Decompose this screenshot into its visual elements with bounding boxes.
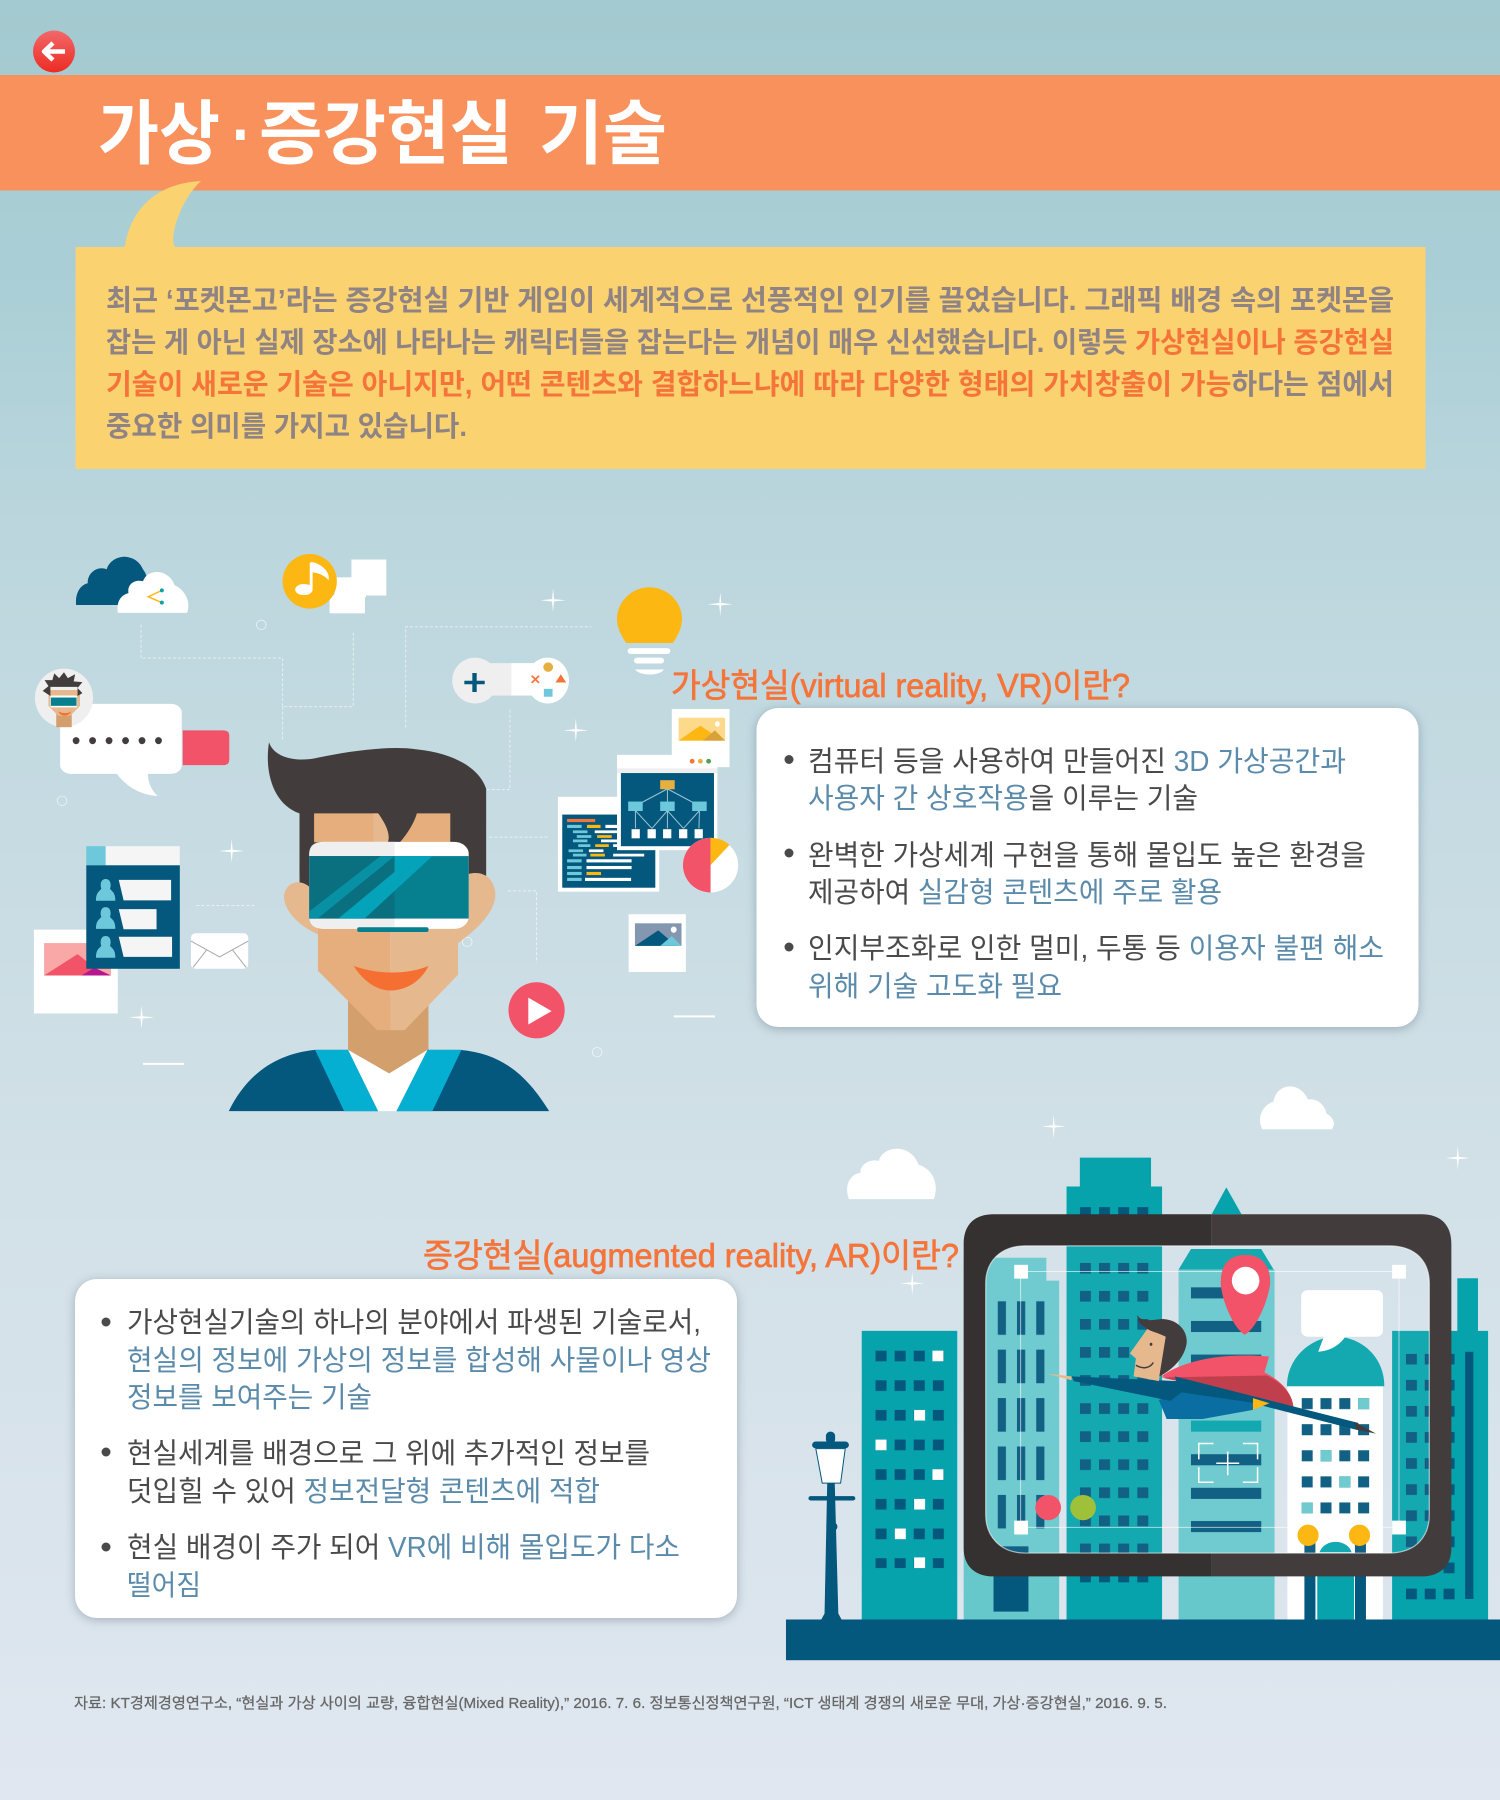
panel: intro speech box xyxy=(76,181,1426,469)
icon: image window xyxy=(672,709,729,767)
icon: hierarchy window xyxy=(617,755,717,850)
building F xyxy=(1392,1278,1488,1619)
AR bullet list: 현실의 정보에 가상의 정보를 합성해 사물이나 영상 xyxy=(127,1345,711,1377)
VR bullet list: 완벽한 가상세계 구현을 통해 몰입도 높은 환경을 xyxy=(808,840,1366,872)
icon: pie chart xyxy=(683,838,738,892)
AR overlay: coloured dots xyxy=(1035,1495,1370,1546)
tablet frame xyxy=(964,1214,1451,1576)
VR bullet list: 위해 기술 고도화 필요 xyxy=(808,971,1062,1003)
icon: speech bubble with avatar xyxy=(35,669,229,796)
VR bullet list: 컴퓨터 등을 사용하여 만들어진 3D 가상공간과 xyxy=(808,746,1346,778)
mouth xyxy=(354,966,428,991)
dashed connector lines xyxy=(141,625,591,963)
icon: clouds xyxy=(76,557,188,613)
panel: VR description xyxy=(756,708,1418,1027)
flying superhero xyxy=(1046,1315,1376,1434)
icon: photo card xyxy=(34,930,118,1013)
VR bullet list: 제공하여 실감형 콘텐츠에 주로 활용 xyxy=(808,877,1222,909)
sparkles xyxy=(57,588,733,1065)
building A xyxy=(862,1331,957,1619)
AR bullet list: 정보를 보여주는 기술 xyxy=(127,1382,372,1414)
AR overlay: location pin xyxy=(1221,1255,1270,1335)
icon: light bulb xyxy=(617,587,682,675)
intro text xyxy=(106,285,1394,443)
title: · xyxy=(232,95,252,173)
icon: play button xyxy=(508,982,565,1038)
heading: AR: 증강현실(augmented reality, AR)이란? xyxy=(423,1237,959,1274)
icon: code window xyxy=(558,797,659,892)
face xyxy=(318,927,390,1030)
intro text: 잡는 게 아닌 실제 장소에 나타나는 캐릭터들을 잡는다는 개념이 매우 신선했습니다. 이렇듯 가상현실이나 증강현실 xyxy=(106,327,1394,359)
source footnote: 자료: KT경제경영연구소, “현실과 가상 사이의 교량, 융합현실(Mixed Reality),” 2016. 7. 6. 정보통신정책연구원, “ICT 생태계 경쟁의 새로운 무대, 가상·증강현실,” 2016. 9. 5. xyxy=(74,1695,1167,1712)
street lamp xyxy=(808,1432,855,1619)
illustration: VR man with floating icons xyxy=(34,554,738,1111)
icon: landscape photo xyxy=(629,914,686,972)
buildings xyxy=(862,1158,1488,1619)
intro text: 최근 ‘포켓몬고’라는 증강현실 기반 게임이 세계적으로 선풍적인 인기를 끌었습니다. 그래픽 배경 속의 포켓몬을 xyxy=(106,285,1394,317)
VR bullet list: 사용자 간 상호작용을 이루는 기술 xyxy=(808,783,1198,815)
illustration: AR city with tablet xyxy=(786,1086,1500,1660)
icon: game controller xyxy=(452,658,569,703)
AR overlay: selection box xyxy=(1014,1265,1406,1534)
AR overlay: speech bubble xyxy=(1301,1290,1383,1352)
AR overlay: focus bracket xyxy=(1199,1444,1258,1482)
VR bullet list: 인지부조화로 인한 멀미, 두통 등 이용자 불편 해소 xyxy=(808,933,1384,965)
building D xyxy=(1179,1187,1275,1619)
AR bullet list: 떨어짐 xyxy=(127,1570,201,1602)
icon: contact list xyxy=(86,846,180,969)
building B xyxy=(964,1258,1059,1619)
hair xyxy=(268,742,486,876)
goggles xyxy=(309,842,469,929)
back button icon xyxy=(33,30,75,72)
AR bullet list: 현실세계를 배경으로 그 위에 추가적인 정보를 xyxy=(127,1438,650,1470)
AR bullet list: 현실 배경이 주가 되어 VR에 비해 몰입도가 다소 xyxy=(127,1532,680,1564)
icon: music xyxy=(283,554,386,613)
heading: VR: 가상현실(virtual reality, VR)이란? xyxy=(671,667,1130,704)
title band xyxy=(0,75,1500,190)
AR bullet list: 가상현실기술의 하나의 분야에서 파생된 기술로서, xyxy=(127,1307,701,1339)
ears xyxy=(284,882,320,935)
AR bullet list xyxy=(102,1307,711,1602)
VR bullet list xyxy=(784,746,1384,1003)
title: 기술 xyxy=(539,95,667,173)
intro text: 중요한 의미를 가지고 있습니다. xyxy=(106,411,467,443)
AR bullet list: 덧입힐 수 있어 정보전달형 콘텐츠에 적합 xyxy=(127,1476,600,1508)
ground xyxy=(786,1619,1500,1660)
neck xyxy=(348,994,428,1074)
forehead xyxy=(314,813,389,842)
title: 가상 xyxy=(98,95,220,173)
building E xyxy=(1287,1337,1384,1619)
title: 증강현실 xyxy=(259,95,513,173)
VR man figure xyxy=(229,742,549,1111)
panel: AR description xyxy=(75,1279,737,1618)
icon: envelope xyxy=(191,933,248,969)
jacket xyxy=(229,1050,549,1111)
building C xyxy=(1067,1158,1162,1619)
intro text: 기술이 새로운 기술은 아니지만, 어떤 콘텐츠와 결합하느냐에 따라 다양한 형태의 가치창출이 가능하다는 점에서 xyxy=(106,369,1394,401)
clouds and sparkles xyxy=(847,1086,1470,1295)
